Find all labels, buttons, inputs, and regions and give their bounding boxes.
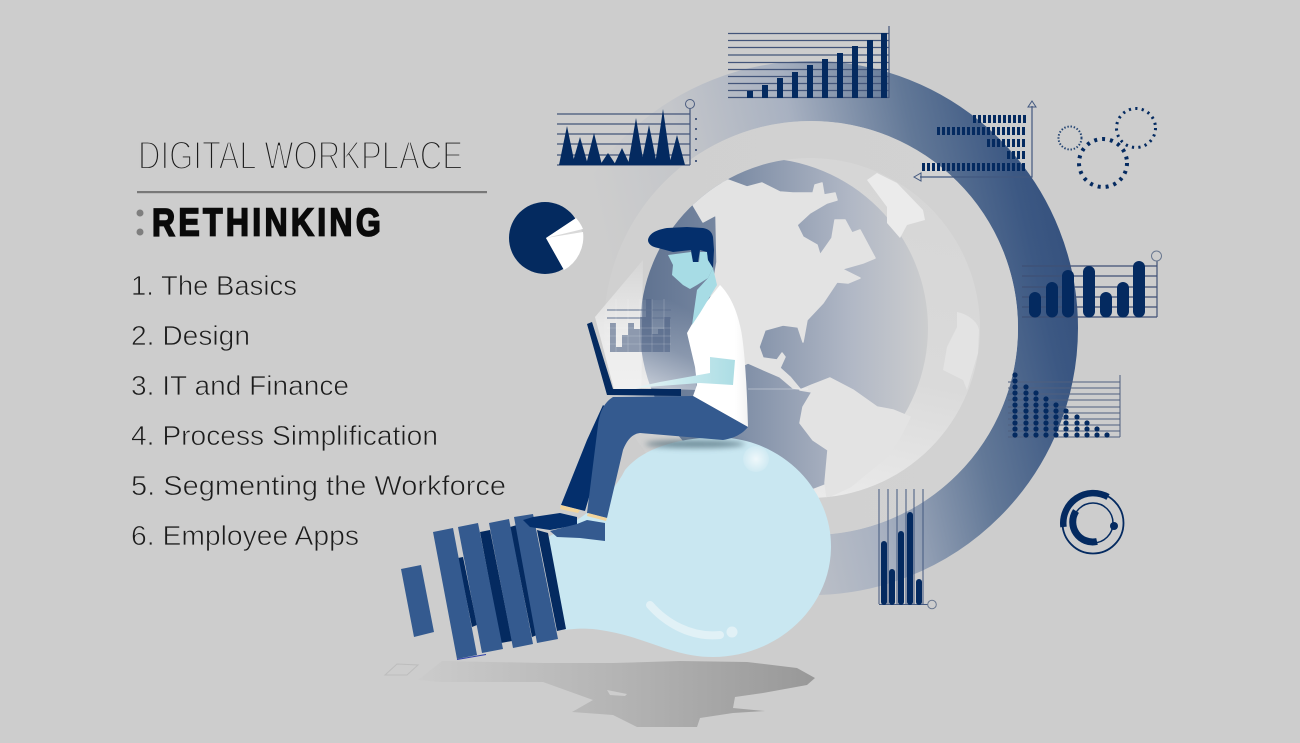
ocean [640, 160, 928, 489]
title: Digital Workplace: DIGITAL WORKPLACE [138, 134, 463, 178]
screen glow, left [595, 260, 643, 393]
area chart: triangle peaks [557, 100, 697, 165]
face [668, 252, 713, 289]
land: South America [799, 377, 904, 484]
left shoe [523, 513, 577, 530]
bulb base threads [401, 514, 566, 660]
front leg [587, 396, 748, 518]
land: Greenland [867, 173, 925, 238]
screen glow, over globe [641, 300, 697, 390]
list of topics: 2. Design [131, 320, 250, 351]
icon: circular dial [1062, 492, 1124, 554]
list of topics: 5. Segmenting the Workforce [131, 470, 506, 501]
land: Africa edge [943, 312, 979, 390]
horizontal bar chart with axes [914, 101, 1036, 181]
dot chart [1008, 372, 1120, 438]
list of topics: 3. IT and Finance [131, 370, 349, 401]
shadow under thigh [645, 440, 745, 448]
laptop [587, 322, 681, 396]
bar chart: rising columns [728, 26, 889, 98]
back leg [561, 405, 620, 511]
list of topics: 4. Process Simplification [131, 420, 438, 451]
laptop chart [607, 299, 671, 352]
infographic canvas [132, 26, 1162, 727]
icon: pie chart [509, 202, 583, 274]
bulb highlight [650, 605, 720, 635]
person with laptop [523, 227, 748, 541]
right shoe [550, 520, 605, 541]
list of topics: 1. The Basics [131, 270, 297, 301]
arm [633, 357, 735, 388]
list of topics: 6. Employee Apps [131, 520, 359, 551]
icon: gears [1058, 108, 1156, 187]
light bulb [401, 437, 831, 660]
shadow on floor [385, 661, 815, 727]
land: North America [693, 180, 875, 389]
globe [640, 160, 979, 498]
subtitle: Rethinking: RETHINKING [152, 202, 384, 244]
list of topics [131, 270, 506, 551]
neck [692, 268, 717, 325]
socks [560, 505, 607, 521]
shirt [687, 285, 748, 427]
bulb glass [548, 437, 831, 657]
hair [648, 227, 714, 268]
ring around globe [574, 91, 1048, 565]
rounded bar chart [1022, 251, 1162, 318]
vertical bar chart [879, 489, 936, 609]
